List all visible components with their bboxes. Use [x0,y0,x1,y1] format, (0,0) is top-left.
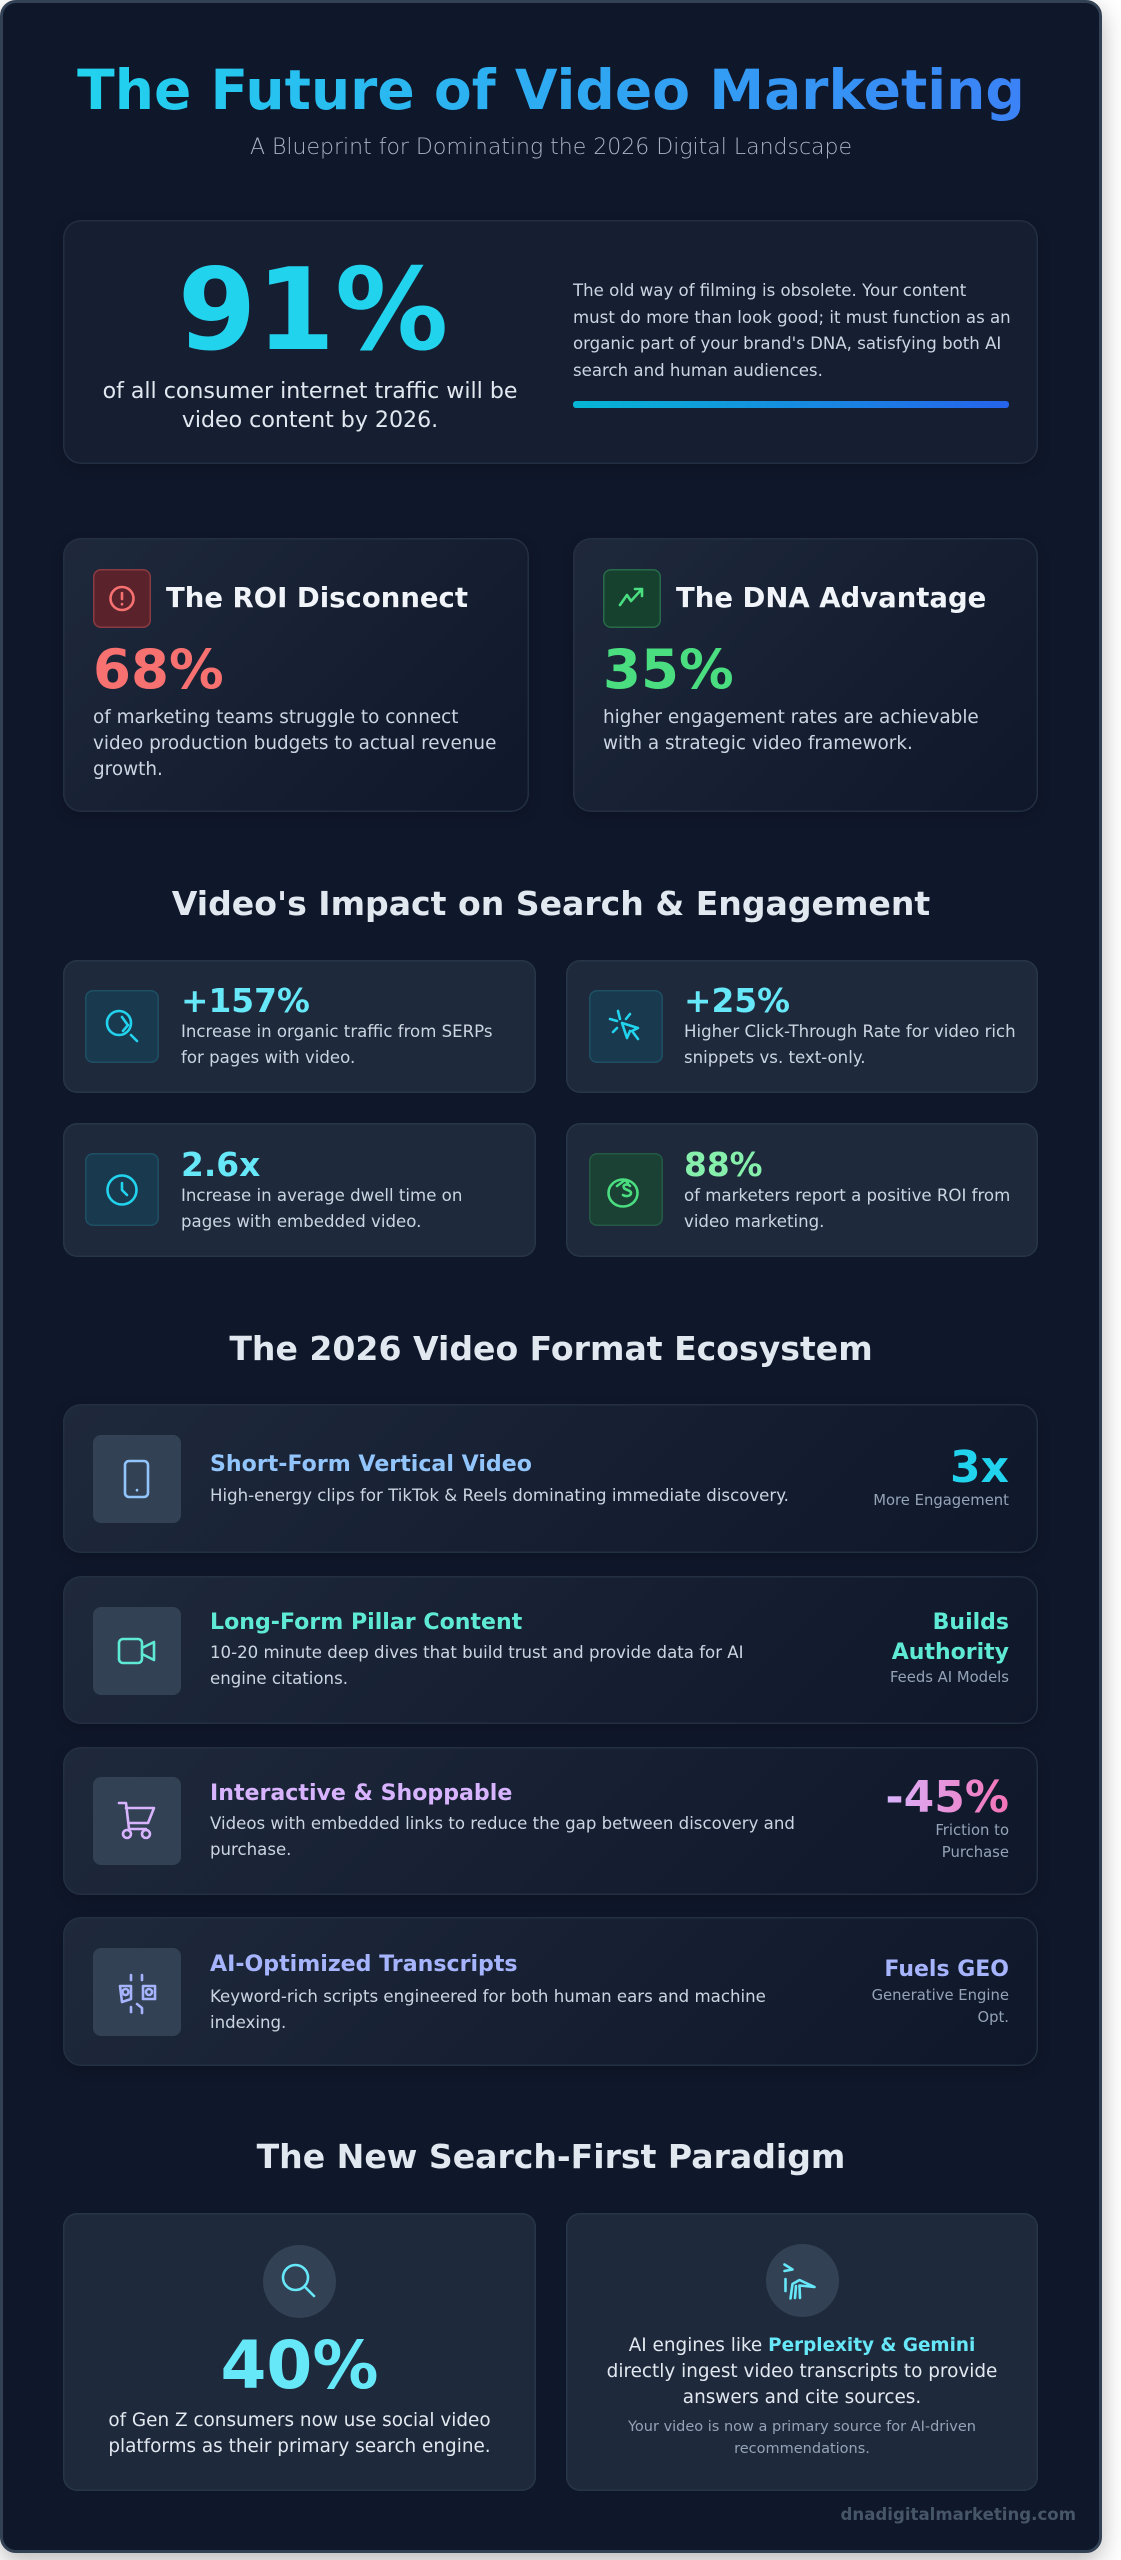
panel: AI transcripts [63,1917,1038,2066]
panel: long-form content [63,1576,1038,1724]
heading: The DNA Advantage [676,582,986,614]
metric value: Fuels GEO [884,1957,1009,1982]
icon: alert [93,569,151,628]
icon: cursor click [589,990,663,1063]
hero stat caption: video content by 2026. [182,407,438,433]
big number 91%: 91% [178,244,448,376]
metric label: Purchase [942,1844,1009,1861]
text [684,1022,1016,1067]
panel: AI engines [566,2213,1038,2491]
text: directly ingest video transcripts to provide [607,2361,997,2382]
text [108,2410,491,2457]
hero stat caption [103,378,517,433]
panel: stat click-through [566,960,1038,1093]
metric label: Generative Engine [872,1986,1009,2004]
panel: Gen Z search [63,2213,536,2491]
metric value: 3x [950,1442,1009,1493]
text: snippets vs. text-only. [684,1048,866,1067]
footer credit: dnadigitalmarketing.com [840,2505,1076,2524]
metric label: Friction to [935,1822,1009,1839]
panel: hero stat [63,220,1038,464]
metric label: Feeds AI Models [890,1669,1009,1686]
icon: AI mark circle [766,2244,839,2317]
format title: AI-Optimized Transcripts [210,1951,518,1977]
format title: Long-Form Pillar Content [210,1609,522,1635]
subtitle: A Blueprint for Dominating the 2026 Digital Landscape [250,135,852,160]
text [684,1186,1010,1231]
text: Increase in organic traffic from SERPs [181,1022,493,1041]
hero description [572,281,1011,380]
format title: Short-Form Vertical Video [210,1451,532,1477]
stat 68%: 68% [93,637,224,701]
metric [873,1442,1009,1509]
description: of marketing teams struggle to connect [93,707,459,728]
description [93,707,496,780]
stat 35%: 35% [603,637,734,701]
metric value [892,1610,1009,1664]
text: video marketing. [684,1212,824,1231]
note: Your video is now a primary source for AI-driven [628,2419,976,2435]
format description: Keyword-rich scripts engineered for both human ears and machine [210,1987,766,2006]
metric label [935,1822,1009,1861]
text: answers and cite sources. [683,2387,921,2408]
format description [210,1814,795,1859]
format title: Interactive & Shoppable [210,1780,512,1806]
format description: engine citations. [210,1669,348,1688]
icon: AI brain [93,1948,181,2036]
text [607,2335,997,2408]
panel: stat dwell time [63,1123,536,1257]
text: pages with embedded video. [181,1212,421,1231]
heading: format ecosystem: The 2026 Video Format Ecosystem [229,1329,873,1368]
stat 40%: 40% [220,2327,378,2404]
text: AI engines like Perplexity & Gemini [629,2335,975,2356]
gradient accent bar [573,401,1009,408]
hero description: search and human audiences. [573,361,823,380]
format description: 10-20 minute deep dives that build trust and provide data for AI [210,1643,744,1662]
metric label [872,1986,1009,2026]
value: +25% [684,982,790,1020]
heading: search and engagement: Video's Impact on Search & Engagement [172,884,930,923]
panel: ROI disconnect [63,538,529,812]
value: 88% [684,1146,763,1184]
metric value: -45% [885,1772,1009,1823]
icon: dollar circle [589,1153,663,1226]
description: video production budgets to actual revenue [93,733,496,754]
format description: Videos with embedded links to reduce the gap between discovery and [210,1814,795,1833]
panel: interactive and shoppable [63,1747,1038,1895]
note [628,2419,976,2457]
icon: cart [93,1777,181,1865]
metric value: Authority [892,1640,1009,1664]
metric label: More Engagement [873,1492,1009,1509]
metric [872,1957,1009,2026]
value: +157% [181,982,310,1020]
text: of marketers report a positive ROI from [684,1186,1010,1205]
hero stat caption: of all consumer internet traffic will be [103,378,517,404]
icon: video camera [93,1607,181,1695]
icon: search circle [263,2245,336,2318]
metric [885,1772,1009,1861]
panel: DNA advantage [573,538,1038,812]
hero description: must do more than look good; it must function as an [573,308,1011,327]
heading: The ROI Disconnect [166,582,468,614]
value: 2.6x [181,1146,260,1184]
text: of Gen Z consumers now use social video [108,2410,491,2431]
icon: phone [93,1435,181,1523]
format description: purchase. [210,1840,291,1859]
text: platforms as their primary search engine. [108,2436,491,2457]
metric [890,1610,1009,1686]
icon: search [85,990,159,1063]
icon: clock [85,1153,159,1226]
text: Higher Click-Through Rate for video rich [684,1022,1016,1041]
hero description: The old way of filming is obsolete. Your content [573,281,966,300]
note: recommendations. [734,2441,870,2457]
format description [210,1987,766,2032]
text [181,1022,493,1067]
description: higher engagement rates are achievable [603,707,979,728]
heading: search-first paradigm: The New Search-First Paradigm [257,2137,845,2176]
text: for pages with video. [181,1048,355,1067]
format description [210,1643,744,1688]
title: The Future of Video Marketing [77,58,1025,122]
hero description: organic part of your brand's DNA, satisfying both AI [573,334,1001,353]
icon: trending up [603,569,661,628]
description: growth. [93,759,163,780]
panel: stat organic traffic [63,960,536,1093]
description: with a strategic video framework. [603,733,913,754]
description [603,707,979,754]
panel: short-form video [63,1404,1038,1553]
metric label: Opt. [977,2008,1009,2026]
panel: stat ROI [566,1123,1038,1257]
text [181,1186,462,1231]
format description: High-energy clips for TikTok & Reels dominating immediate discovery. [210,1486,789,1505]
text: Increase in average dwell time on [181,1186,462,1205]
format description: indexing. [210,2013,286,2032]
metric value: Builds [933,1610,1009,1635]
